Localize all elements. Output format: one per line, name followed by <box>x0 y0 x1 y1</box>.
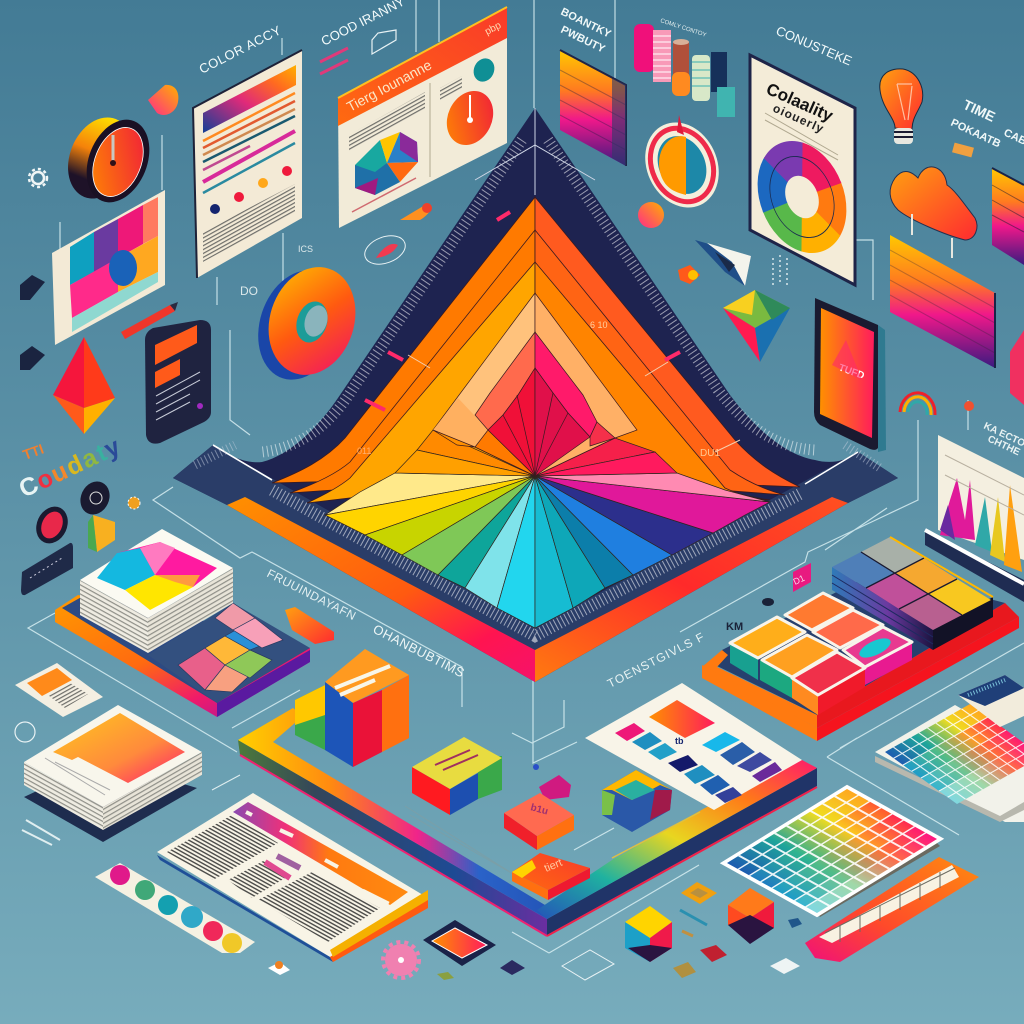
palette sheet <box>585 683 802 810</box>
central pyramid chart <box>173 108 898 682</box>
clock icon <box>56 108 161 212</box>
stacked report: left <box>24 705 202 842</box>
stacked print tray: left <box>55 529 310 717</box>
cube: tricolor left <box>625 906 672 962</box>
lightbulb icon <box>880 69 923 144</box>
peak chart <box>925 435 1024 602</box>
pink tag <box>792 563 811 592</box>
colorful title: Coudaty: u <box>46 457 72 489</box>
icon: tally flag: TTI <box>21 441 46 463</box>
outer orange layer <box>272 197 800 503</box>
label: formulation: FRUUINDAYAFN <box>265 566 359 623</box>
icon: small pen and oval <box>361 203 432 269</box>
text fragments near doc: DO <box>240 284 258 298</box>
colorful title: Coudaty: a <box>77 443 103 474</box>
color chart: main <box>720 785 944 917</box>
gradient panel <box>890 235 995 368</box>
small pieces <box>678 265 700 284</box>
big document <box>157 793 428 962</box>
orange strip <box>952 143 974 157</box>
cylinders: COMLY CONTOY <box>659 18 707 39</box>
mini data card <box>958 675 1024 727</box>
document: color accuracy <box>193 50 302 278</box>
donut chart <box>245 256 369 391</box>
dotted grid <box>773 255 787 287</box>
ruler accents: 6 10 <box>590 320 608 330</box>
document: colorality: Colaality <box>763 79 836 126</box>
phone mockup <box>814 298 886 452</box>
swatch panel: right <box>992 168 1024 265</box>
label: boundary purity <box>559 6 613 56</box>
dash <box>212 775 240 790</box>
colorful title: Coudaty: C <box>15 470 43 503</box>
label: changes: OHANBUBTIMS <box>371 621 467 680</box>
rim left <box>227 497 535 682</box>
rainbow blob <box>97 542 217 610</box>
label: time <box>949 96 1024 150</box>
upper gradient stack <box>832 537 993 650</box>
document: trend panel: pbp <box>483 20 504 38</box>
swatch panel: top center <box>560 50 626 166</box>
tier block <box>512 853 590 900</box>
ruler accents: DU1 <box>700 448 720 459</box>
colorful title: Coudaty: t <box>92 438 112 468</box>
ruler: navy outer band <box>173 108 898 682</box>
circle strip <box>95 863 255 953</box>
document: trend panel: Tierg Iounanne <box>344 56 434 115</box>
document: trend panel <box>338 7 507 228</box>
ball <box>638 202 664 228</box>
label: ratio: CHTHE <box>986 434 1022 458</box>
document: colorality <box>745 55 859 285</box>
rim right <box>535 497 848 682</box>
device panel <box>145 320 211 444</box>
colorful title: Coudaty <box>15 432 124 503</box>
small black marks: KM <box>726 621 743 633</box>
red pyramid <box>53 337 115 434</box>
icon: red-orange chip <box>285 607 334 644</box>
label: toenstgivls: TOENSTGIVLS F <box>605 629 707 691</box>
icon: small dials <box>30 477 140 552</box>
colorful title: Coudaty: o <box>32 464 58 495</box>
icon: small camera outline <box>372 30 396 54</box>
paper plane <box>695 240 751 286</box>
ruler card <box>805 857 979 962</box>
tier block: tiert <box>543 857 564 875</box>
icon: orange bird <box>148 85 178 115</box>
phone mockup: TUFD <box>837 362 866 382</box>
cloud icon <box>890 167 977 258</box>
icon: red pen <box>121 302 178 339</box>
small bits <box>268 764 802 980</box>
color stacks tray <box>702 570 1019 741</box>
icon: pink stripes <box>320 48 348 74</box>
small black marks <box>726 598 774 633</box>
label: time: TIME <box>961 96 998 125</box>
hollow cube <box>602 770 672 832</box>
paper stack <box>80 580 148 653</box>
color cube: large <box>295 649 409 767</box>
text fragments near doc: ICS <box>298 244 313 254</box>
label: time: POKAATB <box>949 117 1002 150</box>
fan wedges <box>325 430 770 628</box>
image card stack <box>730 593 912 715</box>
palette tile <box>52 190 165 345</box>
color wheel ring <box>632 110 732 220</box>
document: colorality: oiouerly <box>771 101 826 136</box>
ruler accents: 011 <box>357 446 371 456</box>
small card: article <box>15 663 103 717</box>
3D gem <box>723 290 790 362</box>
card tops <box>730 593 912 695</box>
text fragments near doc <box>240 244 313 298</box>
dot connector <box>964 401 974 411</box>
glass tiles <box>178 603 283 692</box>
dashes <box>22 820 60 845</box>
label: boundary purity: BOANTKY <box>559 6 613 41</box>
inner peak blocks <box>433 293 637 476</box>
color cube: labelled <box>412 737 502 815</box>
rainbow ring chart <box>745 132 859 262</box>
colorful title: Coudaty: y <box>100 432 124 464</box>
color cube: orange red <box>504 775 574 850</box>
icon: gear <box>29 169 47 187</box>
color chart: top-right <box>875 704 1024 822</box>
label: consistency: CONUSTEKE <box>774 23 854 69</box>
polyhedron chart <box>355 132 418 195</box>
pink corner shape <box>1010 330 1024 405</box>
card: navy mini panel <box>21 543 73 595</box>
colorful title: Coudaty: d <box>62 450 88 481</box>
cylinders <box>634 18 735 117</box>
label: color accuracy: COLOR ACCY <box>197 22 284 77</box>
cube: tricolor right <box>728 888 774 944</box>
icon: navy flags <box>20 275 45 370</box>
rainbow icon <box>900 393 935 415</box>
L frame ribbon <box>238 708 817 936</box>
pink tag: D1 <box>792 573 806 587</box>
label: boundary purity: PWBUTY <box>559 24 607 56</box>
palette sheet: tb <box>675 736 684 746</box>
color cube: orange red: b1u <box>529 802 549 817</box>
icon: small ring <box>15 722 35 742</box>
ruler accents <box>357 212 740 459</box>
